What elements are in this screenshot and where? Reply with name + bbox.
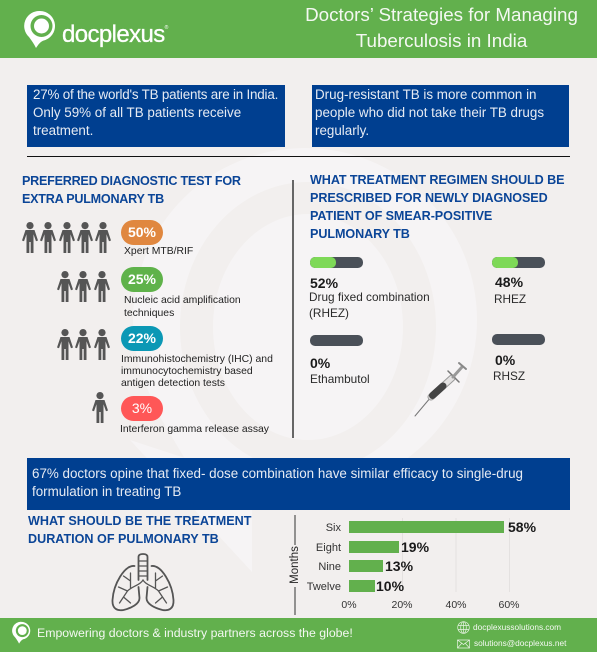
heading: treatment duration: WHAT SHOULD BE THE TREATMENT [28, 514, 251, 528]
website: docplexussolutions.com [473, 622, 561, 632]
heading: PREFERRED DIAGNOSTIC TEST FOR [22, 174, 241, 188]
value 48%: 48% [495, 274, 523, 290]
icon row: 22% [57, 329, 110, 360]
icon: lungs [112, 553, 174, 612]
label [309, 290, 430, 320]
bar chart: duration months: 40% [445, 599, 466, 611]
footer logo [12, 622, 30, 644]
pill 3% [121, 396, 163, 421]
label: Xpert MTB/RIF [124, 246, 193, 257]
icon: syringe [414, 362, 467, 416]
heading: PULMONARY TB [310, 227, 410, 241]
bar chart: duration months: 10% [376, 578, 404, 594]
label: Ethambutol [310, 372, 370, 386]
heading: treatment duration [28, 514, 252, 546]
label: antigen detection tests [121, 378, 225, 389]
pill 50% [121, 220, 163, 245]
title: Tuberculosis in India [356, 30, 527, 50]
x axis labels: 0% [341, 599, 357, 611]
label: techniques [124, 308, 174, 319]
label: RHEZ [494, 292, 526, 306]
heading: WHAT TREATMENT REGIMEN SHOULD BE [310, 173, 564, 187]
fact box: drug resistance: Drug-resistant TB is more common in [315, 87, 537, 102]
bar chart: duration months: 20% [391, 599, 412, 611]
category labels: Six [326, 522, 341, 534]
label: immunocytochemistry based [121, 366, 253, 377]
icon row: 50% [22, 222, 111, 253]
heading [310, 173, 564, 241]
heading: PRESCRIBED FOR NEWLY DIAGNOSED [310, 191, 548, 205]
icon: envelope [457, 640, 470, 648]
icon: globe [457, 621, 470, 634]
fact box: drug resistance: people who did not take their TB drugs [315, 105, 544, 120]
fact box: drug resistance: regularly. [315, 123, 369, 138]
bar chart: duration months [289, 515, 536, 615]
value 0%: 0% [495, 352, 515, 368]
bar 0% [310, 335, 363, 346]
vertical divider [292, 180, 294, 438]
fact box: fixed-dose efficacy [27, 458, 570, 510]
fact box: India share: 27% of the world's TB patients are in India. [33, 87, 278, 102]
heading: treatment duration: DURATION OF PULMONARY TB [28, 532, 219, 546]
email: solutions@docplexus.net [474, 638, 566, 648]
pill 22%: 22% [128, 330, 156, 346]
category labels: Twelve [307, 581, 341, 593]
pill 3%: 3% [132, 400, 152, 416]
bar chart: duration months: 19% [401, 539, 429, 555]
icon row: 3% [92, 392, 108, 423]
bar chart: duration months: 13% [385, 558, 413, 574]
logo wordmark: docplexus® [62, 21, 168, 48]
panel: diagnostic test [22, 174, 273, 435]
category labels: Eight [316, 542, 341, 554]
axis title: Months [289, 546, 301, 584]
label: Drug fixed combination [309, 290, 430, 304]
label [124, 295, 241, 319]
label: Nucleic acid amplification [124, 295, 241, 306]
label: Interferon gamma release assay [120, 424, 269, 435]
title: Doctors’ Strategies for Managing [305, 4, 578, 25]
label: (RHEZ) [309, 306, 349, 320]
fact box: drug resistance [312, 85, 569, 147]
heading: PATIENT OF SMEAR-POSITIVE [310, 209, 492, 223]
title [305, 4, 578, 50]
fact box: India share [27, 85, 285, 147]
value labels: 58% [508, 519, 536, 535]
fact box: India share: Only 59% of all TB patients receive [33, 105, 241, 120]
label: RHSZ [493, 369, 525, 383]
pill 25%: 25% [128, 271, 156, 287]
label: Immunohistochemistry (IHC) and [121, 354, 273, 365]
fact box: fixed-dose efficacy: formulation in treating TB [32, 484, 181, 499]
logo icon [24, 11, 55, 48]
bars [349, 521, 504, 533]
bar 52% [310, 257, 363, 268]
heading [22, 174, 241, 206]
icon row: 25% [57, 271, 110, 302]
fact box: fixed-dose efficacy: 67% doctors opine that fixed- dose combination have similar efficacy to single-drug [32, 466, 523, 481]
bar chart: duration months: 60% [498, 599, 520, 611]
category labels [307, 522, 341, 593]
pill 22% [121, 326, 163, 351]
heading: EXTRA PULMONARY TB [22, 192, 164, 206]
pill 25% [121, 267, 163, 292]
fact box: India share: treatment. [33, 123, 93, 138]
bar 48% [492, 257, 545, 268]
grid lines [294, 515, 510, 615]
bar 0% [492, 334, 545, 345]
pill 50%: 50% [128, 224, 156, 240]
footer band [0, 618, 597, 652]
header band [0, 0, 597, 58]
value 0%: 0% [310, 355, 330, 371]
tagline: Empowering doctors & industry partners across the globe! [37, 626, 353, 640]
value 52%: 52% [310, 275, 338, 291]
divider [27, 156, 570, 157]
category labels: Nine [318, 561, 341, 573]
panel: treatment regimen [309, 173, 564, 416]
label [121, 354, 273, 389]
